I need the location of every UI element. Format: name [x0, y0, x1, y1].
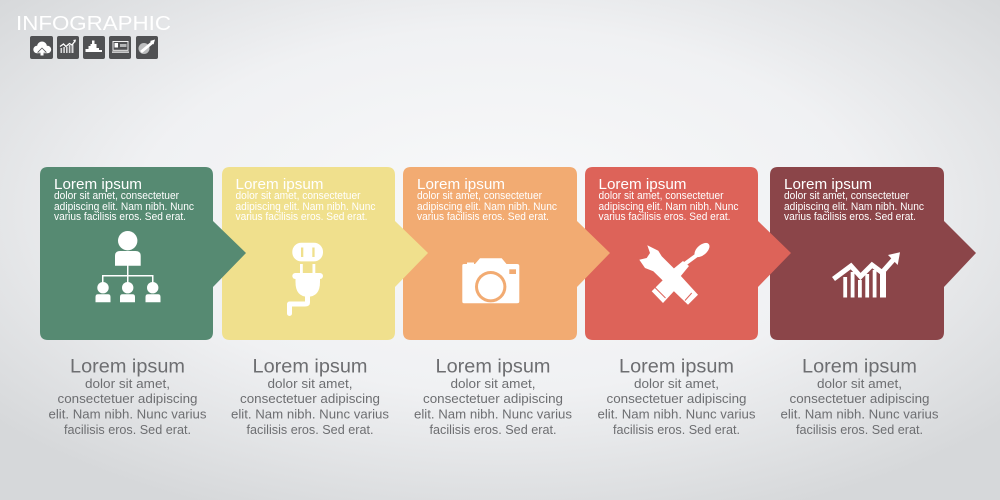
- panel text: Lorem ipsum: [784, 176, 872, 193]
- icon: pencil and ruler: [136, 36, 158, 59]
- panel 1: organisation: [40, 167, 246, 340]
- panel text: dolor sit amet, consectetuer: [598, 190, 724, 202]
- caption 2: Lorem ipsum: [252, 356, 368, 378]
- panel text: adipiscing elit. Nam nibh. Nunc: [784, 201, 924, 213]
- caption 3: facilisis eros. Sed erat.: [430, 422, 556, 437]
- caption 1: dolor sit amet,: [85, 376, 170, 391]
- caption 4: facilisis eros. Sed erat.: [613, 422, 740, 437]
- panel shape: [222, 167, 428, 340]
- caption 2: [231, 356, 390, 437]
- panel text: dolor sit amet, consectetuer: [784, 190, 909, 202]
- caption 2: dolor sit amet,: [268, 376, 352, 391]
- icon: growth chart: [57, 36, 79, 59]
- panel text: varius facilisis eros. Sed erat.: [236, 211, 368, 223]
- caption 5: dolor sit amet,: [817, 376, 902, 391]
- caption 4: [598, 356, 756, 437]
- title: INFOGRAPHIC: [16, 12, 171, 35]
- panel shape: [40, 167, 246, 340]
- panel text: [598, 176, 739, 223]
- caption 4: consectetuer adipiscing: [606, 391, 746, 406]
- panel shape: [403, 167, 610, 340]
- icon: wrench and screwdriver: [639, 240, 712, 305]
- icon: id card: [109, 36, 131, 59]
- caption 3: elit. Nam nibh. Nunc varius: [414, 406, 573, 422]
- caption 3: Lorem ipsum: [436, 356, 550, 378]
- panel 3: camera: [403, 167, 610, 340]
- caption 1: elit. Nam nibh. Nunc varius: [48, 406, 207, 422]
- panel text: [54, 176, 194, 223]
- panel text: [236, 176, 376, 223]
- caption 2: consectetuer adipiscing: [240, 391, 380, 406]
- icon: camera: [462, 258, 519, 303]
- caption 2: elit. Nam nibh. Nunc varius: [231, 406, 390, 422]
- panel text: adipiscing elit. Nam nibh. Nunc: [598, 201, 739, 213]
- panel text: [417, 176, 557, 223]
- panel text: dolor sit amet, consectetuer: [54, 190, 179, 202]
- panel 5: growth: [770, 167, 976, 340]
- caption 3: consectetuer adipiscing: [423, 391, 563, 406]
- icon: cloud upload: [30, 36, 53, 59]
- caption 1: consectetuer adipiscing: [58, 391, 198, 406]
- panel text: Lorem ipsum: [417, 176, 505, 193]
- panel text: adipiscing elit. Nam nibh. Nunc: [236, 201, 376, 213]
- caption 4: Lorem ipsum: [619, 356, 734, 378]
- caption 5: facilisis eros. Sed erat.: [796, 422, 923, 437]
- caption 4: dolor sit amet,: [634, 376, 719, 391]
- header icon row: [30, 36, 158, 59]
- caption 4: elit. Nam nibh. Nunc varius: [598, 406, 756, 422]
- panel text: dolor sit amet, consectetuer: [417, 190, 542, 202]
- panel text: Lorem ipsum: [236, 176, 324, 193]
- panel shape: [585, 167, 791, 340]
- panel text: adipiscing elit. Nam nibh. Nunc: [417, 201, 557, 213]
- caption 1: [48, 356, 207, 437]
- icon: rising chart: [834, 252, 900, 298]
- panel shape: [770, 167, 976, 340]
- caption 1: facilisis eros. Sed erat.: [64, 422, 191, 437]
- icon: skyline bars: [83, 36, 105, 59]
- panel 2: power plug: [222, 167, 428, 340]
- caption 3: [414, 356, 573, 437]
- caption 5: consectetuer adipiscing: [790, 391, 930, 406]
- panel text: Lorem ipsum: [598, 176, 686, 193]
- panel text: varius facilisis eros. Sed erat.: [417, 211, 549, 223]
- icon: organisation chart: [96, 231, 160, 302]
- panel text: varius facilisis eros. Sed erat.: [784, 211, 916, 223]
- panel text: varius facilisis eros. Sed erat.: [54, 211, 186, 223]
- panel text: varius facilisis eros. Sed erat.: [598, 211, 730, 223]
- panel text: Lorem ipsum: [54, 176, 142, 193]
- caption 2: facilisis eros. Sed erat.: [246, 422, 374, 437]
- caption 3: dolor sit amet,: [450, 376, 536, 391]
- panel text: adipiscing elit. Nam nibh. Nunc: [54, 201, 194, 213]
- panel text: [784, 176, 924, 223]
- icon: plug: [290, 243, 323, 314]
- panel text: dolor sit amet, consectetuer: [236, 190, 361, 202]
- caption 5: Lorem ipsum: [802, 356, 917, 378]
- caption 5: elit. Nam nibh. Nunc varius: [780, 406, 939, 422]
- panel 4: tools: [585, 167, 791, 340]
- caption 1: Lorem ipsum: [70, 356, 185, 378]
- caption 5: [780, 356, 939, 437]
